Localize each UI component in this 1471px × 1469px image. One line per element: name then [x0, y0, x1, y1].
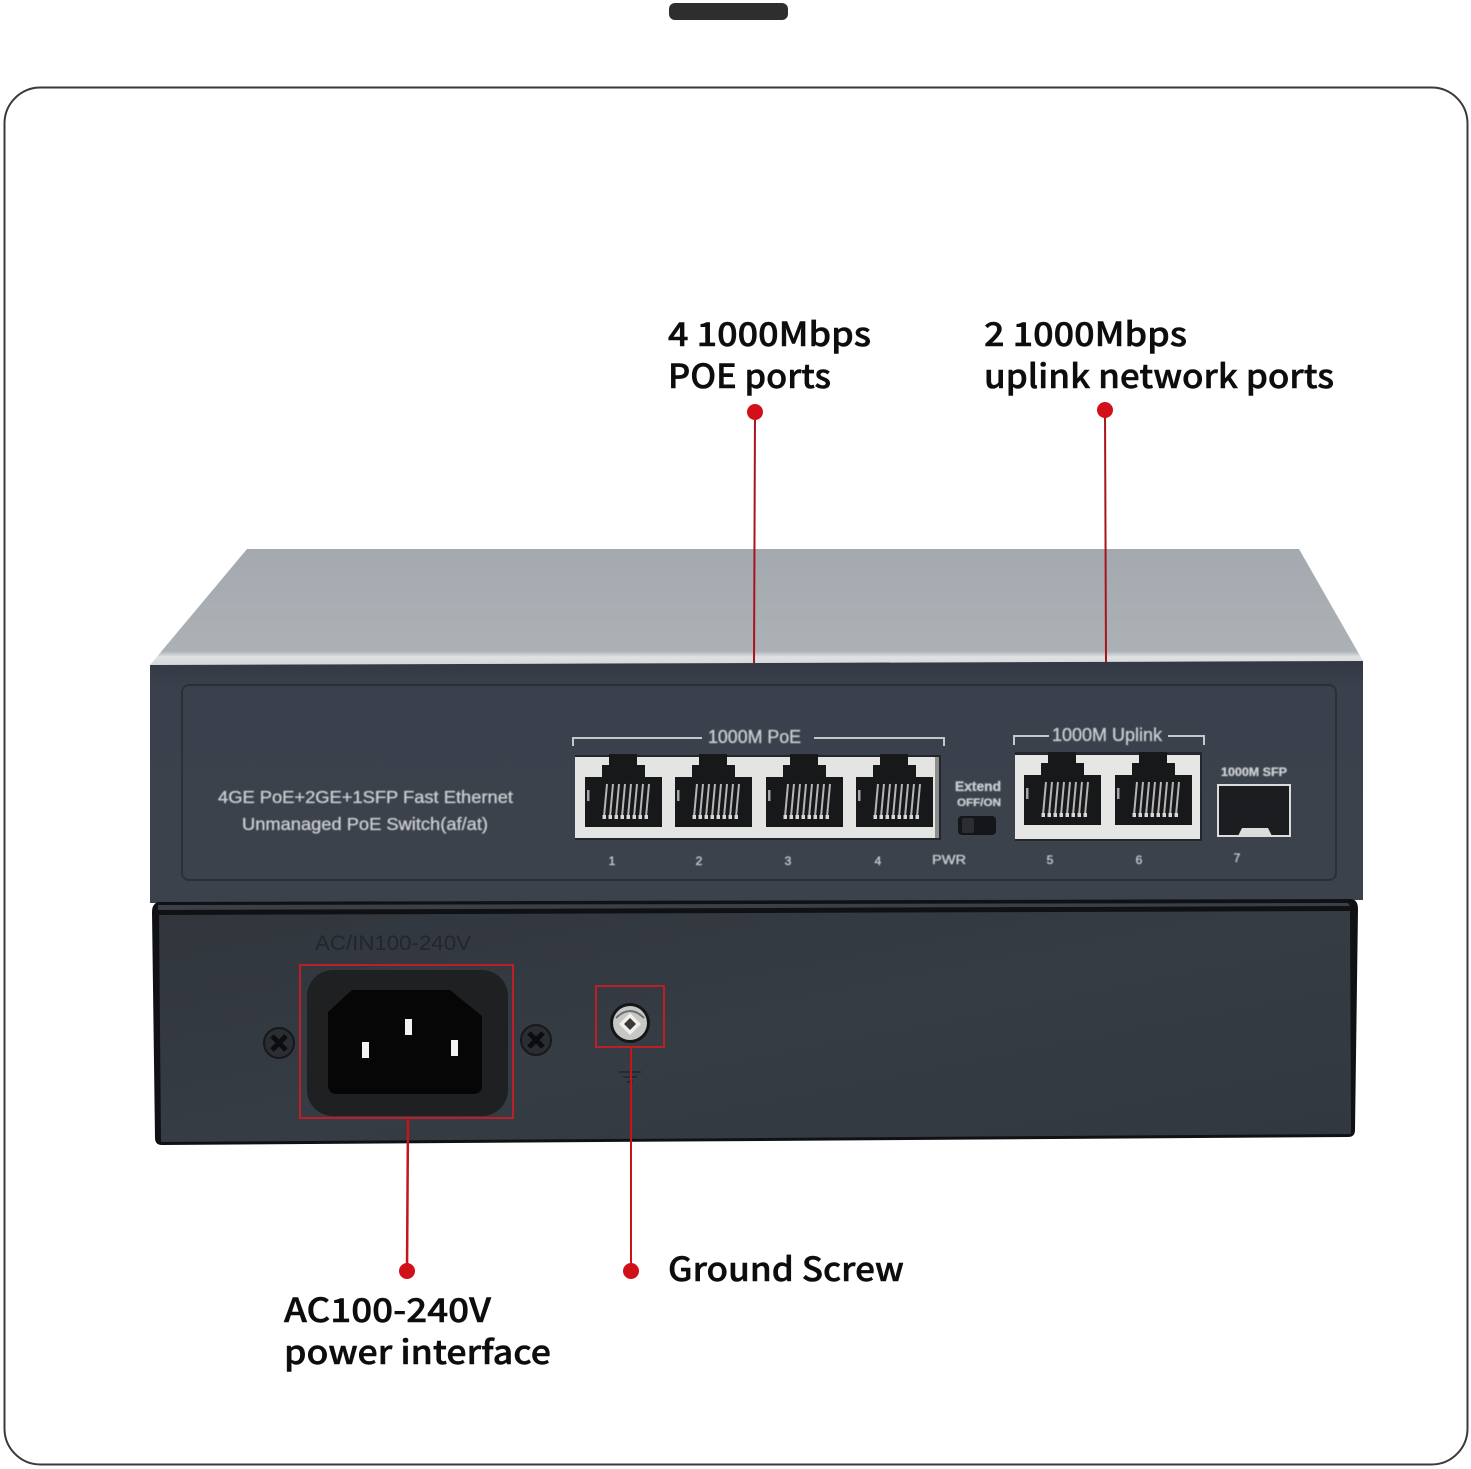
red highlight box: ground screw: [596, 986, 664, 1047]
switch front face: [150, 661, 1363, 903]
SFP port: 7: [1234, 851, 1241, 865]
extend switch: Extend: [955, 778, 1001, 794]
Uplink port numbers: 6: [1136, 853, 1143, 867]
Uplink port group: [1014, 725, 1204, 867]
ground symbol: [619, 1072, 641, 1082]
AC label: AC/IN100-240V: [315, 932, 471, 955]
PoE port 1: [585, 754, 662, 827]
ground screw: [610, 1003, 650, 1043]
PoE port numbers: 2: [696, 854, 703, 868]
PoE port numbers: 3: [785, 854, 792, 868]
model text: 4GE PoE+2GE+1SFP Fast Ethernet: [218, 787, 513, 807]
callout: power interface: power interface: [284, 1326, 551, 1374]
Uplink bracket and label: [1014, 725, 1204, 745]
PoE port numbers: [609, 854, 882, 868]
extend switch: [955, 778, 1001, 835]
callout: ground screw: Ground Screw: [668, 1243, 904, 1291]
rear face: [159, 911, 1351, 1142]
left mounting screw: [264, 1028, 294, 1058]
Uplink port 6: [1115, 752, 1192, 825]
PoE port numbers: 1: [609, 854, 616, 868]
PoE port 2: [675, 754, 752, 827]
switch rear unit: [152, 899, 1358, 1145]
PoE bracket and label: 1000M PoE: [708, 727, 801, 747]
SFP port: 1000M SFP: [1221, 765, 1287, 779]
callout: uplink ports: 2 1000Mbps: [984, 308, 1187, 356]
callout: power interface: [284, 1118, 551, 1374]
PoE port 3: [766, 754, 843, 827]
front inset panel: [182, 685, 1336, 880]
PWR label: PWR: [932, 852, 966, 867]
Uplink port numbers: 5: [1047, 853, 1054, 867]
callout: PoE ports: 4 1000Mbps: [668, 308, 871, 356]
red highlight box: power socket: [300, 965, 513, 1118]
PoE white block: [575, 755, 941, 840]
callout: uplink ports: uplink network ports: [984, 350, 1334, 398]
switch top face: [150, 549, 1363, 665]
extend switch: OFF/ON: [957, 797, 1001, 809]
PoE port 4: [856, 754, 933, 827]
Uplink port 5: [1024, 752, 1101, 825]
PoE port group: [573, 727, 944, 868]
top handle bar: [669, 3, 788, 20]
callout: power interface: AC100-240V: [284, 1284, 491, 1332]
switch front unit: [150, 549, 1363, 903]
callout: PoE ports: [668, 308, 871, 663]
rear top lip: [158, 903, 1350, 910]
callout: uplink ports: [984, 308, 1334, 662]
Uplink bracket and label: 1000M Uplink: [1052, 725, 1163, 745]
PoE bracket and label: [573, 727, 944, 747]
callout: PoE ports: POE ports: [668, 350, 831, 398]
model text: [218, 787, 513, 834]
model text: Unmanaged PoE Switch(af/at): [242, 814, 488, 834]
Uplink white block: [1015, 752, 1202, 841]
PoE port numbers: 4: [875, 854, 882, 868]
Uplink port numbers: [1047, 853, 1143, 867]
rear outer shell: [152, 899, 1358, 1145]
right mounting screw: [521, 1025, 551, 1055]
callout: ground screw: [623, 1047, 904, 1291]
SFP port: [1218, 765, 1290, 865]
power socket: [307, 970, 508, 1116]
